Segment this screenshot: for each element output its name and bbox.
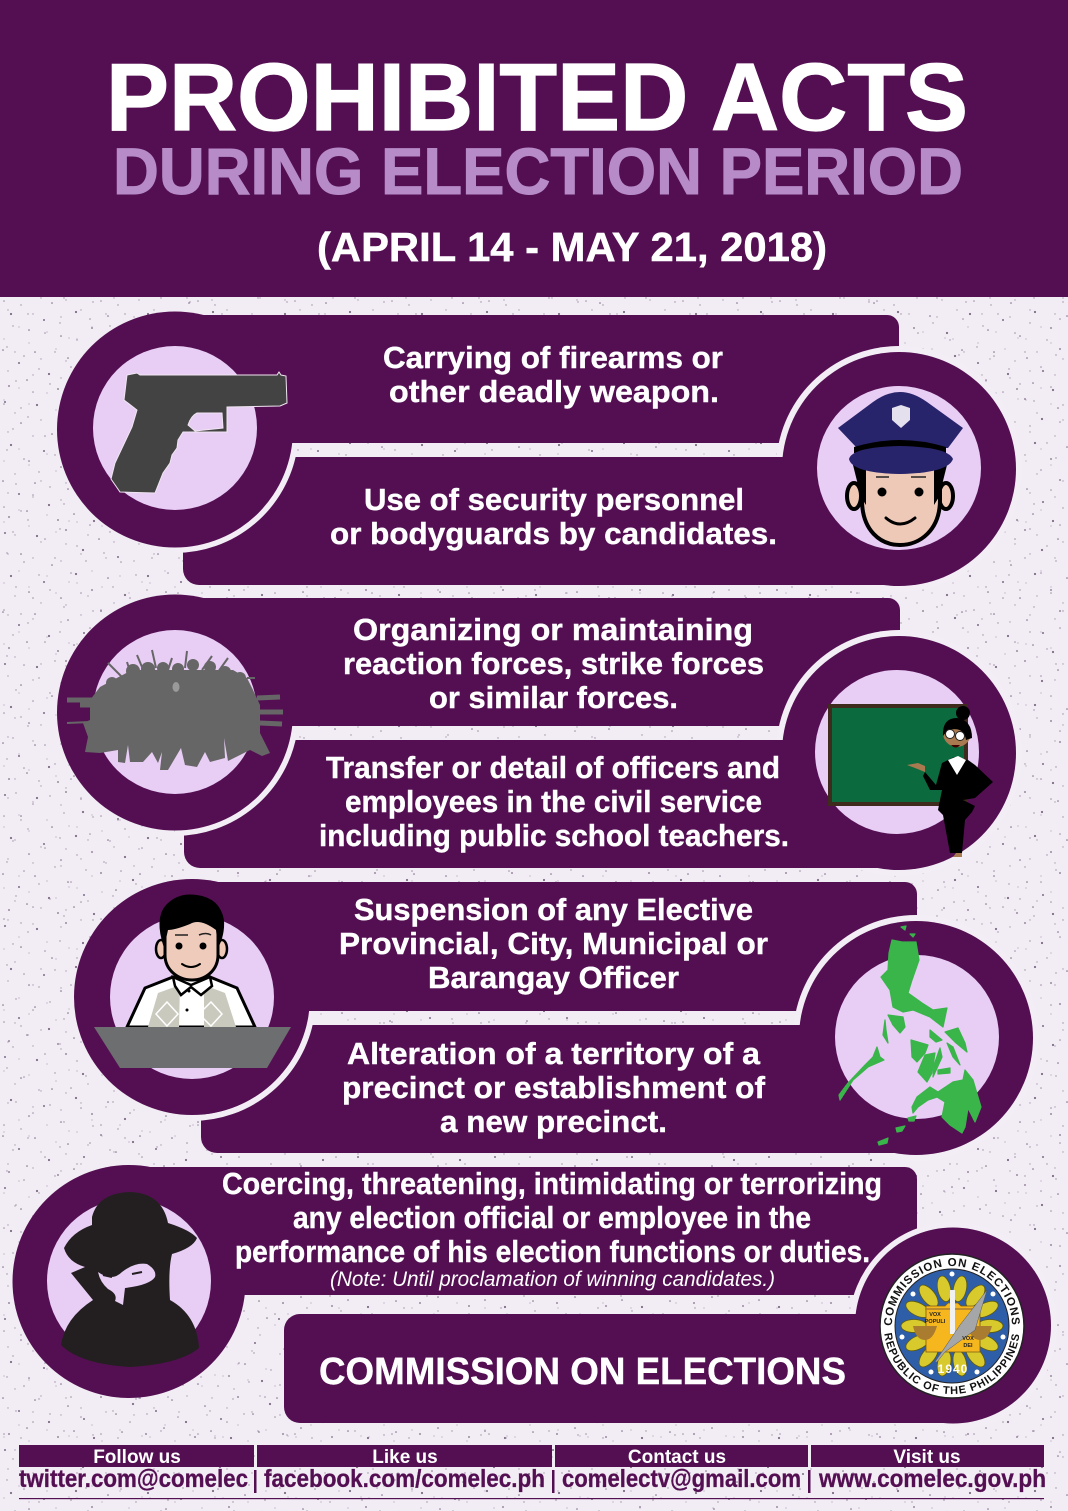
- text: security personnel: [330, 482, 777, 551]
- panel: firearms and security personnel: [57, 312, 1022, 592]
- icon: COMELEC seal: VOX: [929, 1312, 941, 1318]
- panel: coercion and commission: [12, 1165, 1054, 1426]
- footer header bars: Contact us: [628, 1447, 726, 1468]
- text: suspension of officer: [339, 892, 768, 995]
- text: alteration of precinct: Alteration of a territory of a: [347, 1036, 761, 1071]
- text: coercion: Coercing, threatening, intimidating or terrorizing: [222, 1166, 882, 1201]
- footer links: [19, 1465, 1046, 1493]
- text: suspension of officer: Provincial, City, Municipal or: [339, 926, 768, 961]
- text: transfer of officers: employees in the civil service: [345, 784, 762, 819]
- text: transfer of officers: Transfer or detail of officers and: [326, 750, 780, 785]
- footer links: www.comelec.gov.ph: [818, 1465, 1046, 1493]
- text: transfer of officers: including public school teachers.: [319, 818, 789, 853]
- icon: police officer: [838, 392, 963, 545]
- panel: reaction forces and transfer of officers: [57, 594, 1022, 876]
- icon: COMELEC seal: REPUBLIC OF THE PHILIPPINES: [884, 1332, 1019, 1394]
- text: suspension of officer: Suspension of any Elective: [354, 892, 753, 927]
- text: reaction forces: or similar forces.: [429, 680, 678, 715]
- header banner: [0, 0, 1068, 297]
- text: alteration of precinct: precinct or establishment of: [342, 1070, 766, 1105]
- text: alteration of precinct: [342, 1036, 766, 1139]
- text: reaction forces: Organizing or maintaining: [353, 612, 753, 647]
- text: coercion: performance of his election functions or duties.: [235, 1234, 870, 1269]
- icon: COMELEC seal: 1940: [938, 1362, 968, 1376]
- text: carrying of firearms: [383, 340, 723, 409]
- subtitle: DURING ELECTION PERIOD: [113, 134, 963, 208]
- footer header bars: Follow us: [93, 1447, 181, 1468]
- icon: armed group silhouette: [67, 650, 283, 770]
- icon: masked figure: [61, 1192, 199, 1367]
- icon: COMELEC seal: DEI: [963, 1343, 973, 1349]
- text: alteration of precinct: a new precinct.: [440, 1104, 667, 1139]
- icon: COMELEC seal: POPULI: [925, 1319, 946, 1325]
- text: carrying of firearms: other deadly weapon.: [389, 374, 719, 409]
- footer links: twitter.com@comelec: [19, 1465, 248, 1493]
- icon: elected official at podium: [94, 894, 291, 1068]
- text: security personnel: or bodyguards by candidates.: [330, 516, 777, 551]
- title: PROHIBITED ACTS: [106, 44, 968, 151]
- footer links: comelectv@gmail.com: [562, 1465, 801, 1493]
- text: security personnel: Use of security personnel: [364, 482, 744, 517]
- text: coercion: [222, 1166, 882, 1269]
- icon: handgun: [111, 372, 287, 493]
- icon: COMELEC seal: COMMISSION ON ELECTIONS: [884, 1258, 1020, 1326]
- footer header bars: Visit us: [893, 1447, 961, 1468]
- text: suspension of officer: Barangay Officer: [428, 960, 679, 995]
- text: carrying of firearms: Carrying of firearms or: [383, 340, 723, 375]
- text: reaction forces: reaction forces, strike forces: [343, 646, 764, 681]
- text: reaction forces: [343, 612, 764, 715]
- icon: COMELEC seal: VOX: [962, 1336, 974, 1342]
- text: transfer of officers: [319, 750, 789, 853]
- footer header bars: Like us: [372, 1447, 438, 1468]
- footer: contact links: [19, 1445, 1046, 1499]
- footer header bars: [19, 1445, 1044, 1468]
- footer links: facebook.com/comelec.ph: [264, 1465, 545, 1493]
- date range: (APRIL 14 - MAY 21, 2018): [317, 224, 827, 270]
- icon: COMELEC seal: [879, 1253, 1025, 1399]
- note: (Note: Until proclamation of winning candidates.): [330, 1268, 775, 1291]
- icon: teacher at chalkboard: [830, 706, 993, 857]
- commission name: COMMISSION ON ELECTIONS: [319, 1351, 846, 1393]
- text: coercion: any election official or employee in the: [293, 1200, 811, 1235]
- panel: suspension and precinct alteration: [74, 879, 1039, 1161]
- icon: Philippine map: [839, 926, 981, 1145]
